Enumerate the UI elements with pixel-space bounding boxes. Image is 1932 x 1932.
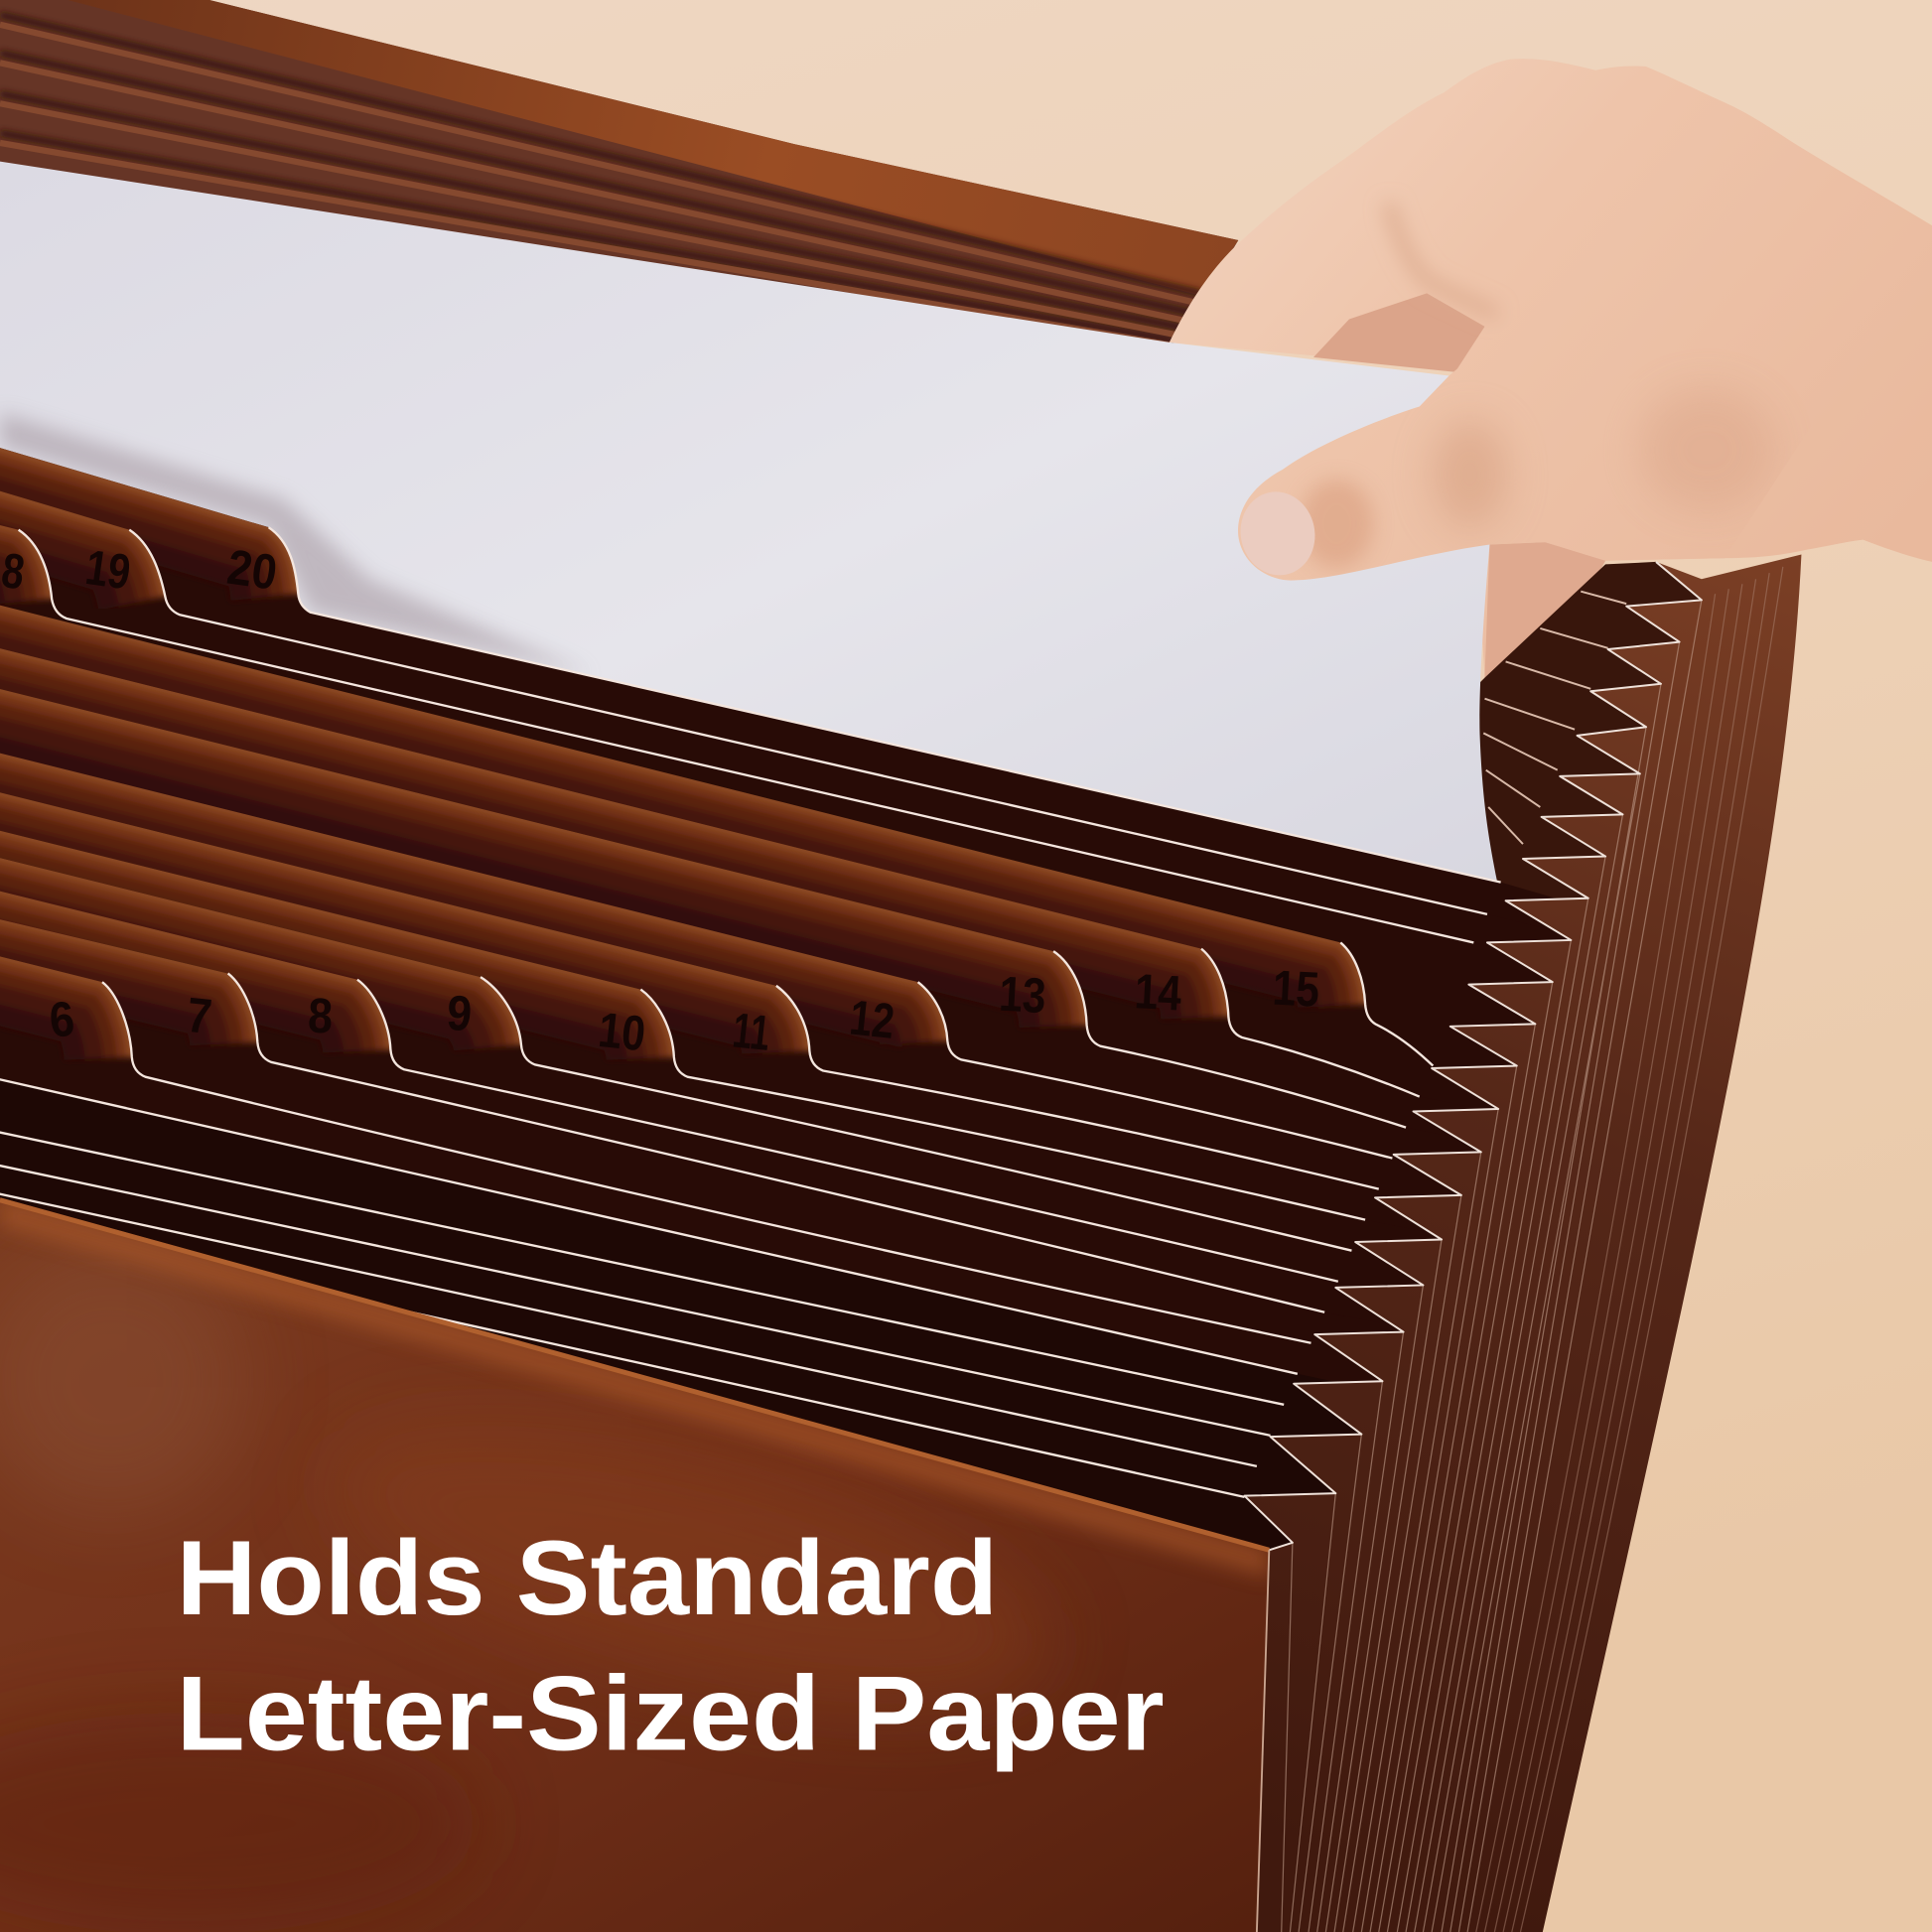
back of the folder xyxy=(0,0,1238,347)
divider tab 9 xyxy=(0,858,1352,1252)
divider tab 14: 14 xyxy=(1133,963,1183,1022)
headline: Holds Standard Letter-Sized Paper: Holds Standard xyxy=(176,1518,998,1637)
divider tab 13 xyxy=(0,689,1406,1129)
divider tab 8 xyxy=(0,892,1338,1283)
divider tab 11: 11 xyxy=(730,1002,772,1061)
divider tab 8: 8 xyxy=(307,988,334,1043)
front dividers 5 to 1 xyxy=(0,1078,1442,1725)
divider tab 19 xyxy=(0,490,1487,915)
divider tab 20 xyxy=(0,448,1555,930)
divider tab 6: 6 xyxy=(47,991,77,1048)
headline: Holds Standard Letter-Sized Paper: Letter-Sized Paper xyxy=(176,1653,1165,1772)
divider tab 18 xyxy=(0,525,1474,944)
white letter-size sheet xyxy=(0,162,1497,881)
hand, fingers and palm behind the sheet xyxy=(1170,59,1932,678)
divider tab 6 xyxy=(0,957,1311,1344)
divider tab 10: 10 xyxy=(596,1002,648,1061)
divider tab 10 xyxy=(0,830,1366,1221)
divider tab 12: 12 xyxy=(847,990,897,1049)
front leather cover xyxy=(0,1197,1269,1932)
divider tab 7 xyxy=(0,919,1324,1313)
divider tab 13: 13 xyxy=(998,966,1047,1024)
divider tab 15: 15 xyxy=(1271,960,1320,1018)
thumb in front of the sheet xyxy=(1238,369,1767,581)
divider tab 15 xyxy=(0,606,1434,1066)
divider tab 14 xyxy=(0,648,1420,1098)
divider tab 11 xyxy=(0,792,1379,1190)
dark pocket beside the sheet xyxy=(1472,562,1702,961)
divider tab 12 xyxy=(0,753,1393,1160)
divider tab 7: 7 xyxy=(184,987,214,1044)
divider tab 20: 20 xyxy=(224,539,280,601)
accordion gusset xyxy=(1244,554,1801,1932)
icon: thumbnail xyxy=(1233,484,1322,582)
divider tab 19: 19 xyxy=(82,539,134,601)
headline: Holds Standard Letter-Sized Paper xyxy=(176,1518,1165,1772)
divider tab 9: 9 xyxy=(445,985,474,1041)
